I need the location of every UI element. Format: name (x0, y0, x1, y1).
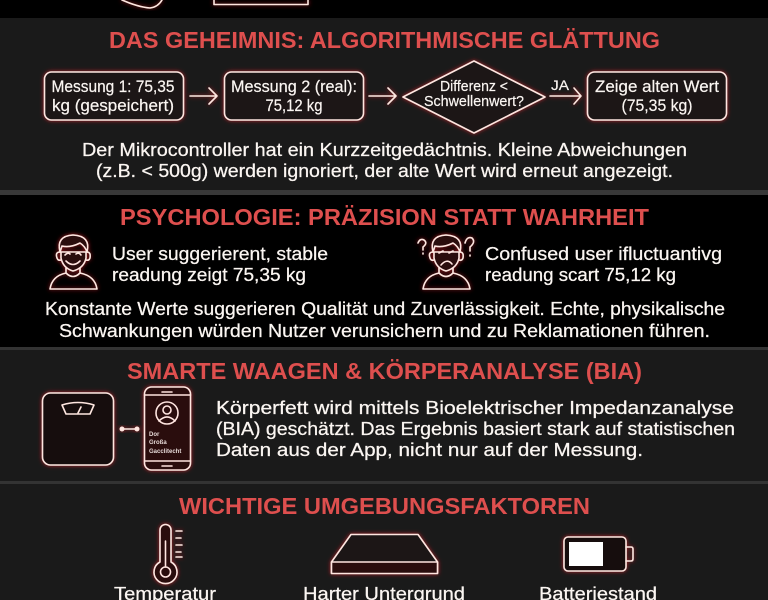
heading: Psychologie: PSYCHOLOGIE: PRÄZISION STATT WAHRHEIT (120, 204, 650, 230)
arrow: decision to result (550, 88, 581, 104)
icon: bathroom scale (42, 393, 114, 465)
icon: happy user (50, 235, 97, 289)
icon: confused user (418, 235, 474, 289)
flow step: result: (75,35 kg) (622, 97, 692, 115)
divider (0, 190, 768, 195)
text: stable reading (112, 244, 328, 285)
text: stable reading: readung zeigt 75,35 kg (112, 265, 306, 285)
explanatory text: Körperfett wird mittels Bioelektrischer Impedanzanalyse (216, 398, 734, 418)
flow step: Messung 2 (224, 72, 364, 120)
flow step: result: Zeige alten Wert (595, 78, 719, 96)
heading: Umgebungsfaktoren: WICHTIGE UMGEBUNGSFAKTOREN (179, 493, 590, 519)
explanatory text: Schwankungen würden Nutzer verunsichern und zu Reklamationen führen. (59, 321, 710, 341)
heading: smarte Waagen: SMARTE WAAGEN & KÖRPERANALYSE (BIA) (127, 358, 642, 384)
heading: algorithmische Glättung: DAS GEHEIMNIS: ALGORITHMISCHE GLÄTTUNG (109, 27, 660, 53)
explanatory text: Konstante Werte suggerieren Qualität und Zuverlässigkeit. Echte, physikalische (45, 299, 725, 319)
text: confused user: readung scart 75,12 kg (485, 265, 676, 285)
divider (0, 347, 768, 350)
explanatory text: Der Mikrocontroller hat ein Kurzzeitgedächtnis. Kleine Abweichungen (82, 140, 687, 160)
icon: smartphone app: Gacclitecht (149, 449, 181, 455)
flow step: Messung 2: 75,12 kg (266, 97, 322, 115)
decision diamond: Differenz < (440, 79, 508, 95)
text: confused user (485, 244, 722, 285)
explanatory text: Daten aus der App, nicht nur auf der Messung. (216, 440, 643, 460)
explanatory text (216, 398, 735, 460)
icon: smartphone app: Großa (149, 440, 167, 446)
text: stable reading: User suggerierent, stable (112, 244, 328, 264)
top strip: cropped icons (122, 0, 308, 8)
divider (0, 481, 768, 484)
icon: smartphone app: Dor (149, 432, 160, 438)
explanatory text: (BIA) geschätzt. Das Ergebnis basiert stark auf statistischen (216, 419, 735, 439)
decision diamond (403, 61, 545, 133)
icon: battery (564, 537, 633, 571)
text: confused user: Confused user ifluctuantivg (485, 244, 722, 264)
explanatory text: (z.B. < 500g) werden ignoriert, der alte Wert wird erneut angezeigt. (96, 161, 673, 181)
arrow: step 1 to 2 (190, 88, 217, 104)
decision diamond: Schwellenwert? (424, 94, 524, 110)
icon: thermometer (154, 524, 182, 584)
flow step: Messung 2: Messung 2 (real): (231, 78, 357, 96)
label: JA: JA (551, 77, 570, 93)
icon: hard surface (332, 534, 438, 574)
flow step: Messung 1 (44, 72, 184, 120)
explanatory text (82, 140, 687, 181)
arrow: step 2 to decision (369, 88, 396, 104)
flow step: Messung 1: kg (gespeichert) (52, 97, 174, 115)
flow step: result (588, 72, 726, 120)
panel: Psychologie (0, 195, 768, 347)
panel: das Geheimnis (0, 18, 768, 190)
icon: smartphone app (144, 387, 190, 470)
explanatory text (45, 299, 725, 341)
icon: connector (120, 426, 140, 432)
flow step: Messung 1: Messung 1: 75,35 (52, 78, 174, 96)
panel: smarte Waagen (0, 350, 768, 481)
panel: Umgebungsfaktoren (0, 484, 768, 600)
